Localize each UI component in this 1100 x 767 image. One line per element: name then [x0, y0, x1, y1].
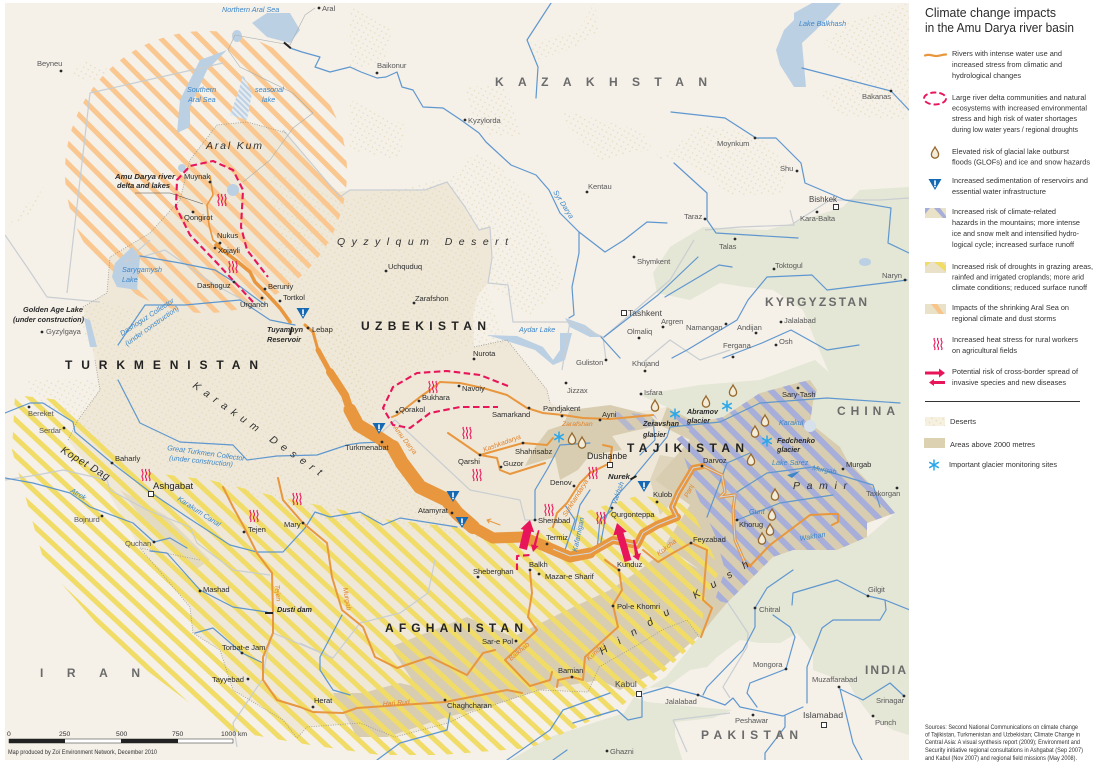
city labels outside the basin: Srinagar [876, 696, 905, 705]
desert and mountain names: Aral Kum [205, 140, 262, 152]
orange river labels: Murgab [341, 587, 352, 611]
feature labels: Fedchenko [777, 436, 815, 445]
borders [5, 63, 909, 752]
city labels outside the basin: Kyzylorda [468, 116, 501, 125]
feature labels: glacier [642, 430, 667, 439]
city labels inside the basin: Pandjakent [543, 404, 581, 413]
capitals [153, 195, 843, 720]
water labels [68, 5, 846, 552]
river basin area [68, 122, 698, 736]
dams [265, 42, 637, 614]
city labels outside the basin: Jizzax [567, 386, 588, 395]
stripes: mountain hazards [665, 380, 895, 603]
city labels outside the basin: Mongora [753, 660, 783, 669]
water labels: Lake [122, 275, 138, 284]
city labels outside the basin: Ghazni [610, 747, 634, 756]
legend: mountain hazards: logical cycle; increased surface runoff [952, 240, 1075, 249]
city labels inside the basin: Darvoz [703, 456, 727, 465]
Panj centre line [553, 466, 745, 563]
basin boundary [68, 122, 699, 738]
city labels inside the basin: Khorug [739, 520, 763, 529]
sources: Security initiative regional consultations in Ashgabat (Sep 2007) [925, 747, 1083, 754]
water labels: Northern Aral Sea [222, 5, 279, 14]
city labels outside the basin: Jalalabad [784, 316, 816, 325]
city labels outside the basin: Peshawar [735, 716, 769, 725]
desert and mountain names: Karakum Desert [190, 380, 325, 479]
delta leader line [135, 193, 203, 204]
city labels inside the basin: Guzor [503, 459, 524, 468]
city labels inside the basin: Torbat-e Jam [222, 643, 265, 652]
city labels outside the basin: Taxkorgan [866, 489, 900, 498]
city labels outside the basin: Chitral [759, 605, 781, 614]
city labels outside the basin: Isfara [644, 388, 663, 397]
city labels inside the basin: Bukhara [422, 393, 451, 402]
scale bar: 0 [7, 731, 11, 738]
city labels inside the basin: Muynak [184, 172, 210, 181]
orange river labels: Kokcha [656, 538, 678, 558]
heat stress icons [142, 194, 605, 524]
city labels inside the basin: Tayyebad [212, 675, 244, 684]
legend: heat stress [934, 335, 1078, 355]
city labels inside the basin [115, 172, 871, 710]
city labels inside the basin: Denov [550, 478, 572, 487]
feature labels: glacier [776, 445, 801, 454]
stripes: Aral Sea impacts [65, 31, 347, 313]
city labels inside the basin: Mary [284, 520, 301, 529]
country names in the basin: AFGHANISTAN [385, 621, 523, 635]
legend: stressed rivers: Rivers with intense water use and [952, 49, 1062, 58]
city labels inside the basin: Tejen [248, 525, 266, 534]
legend: mountain hazards: ice and snow melt and intensified hydro- [952, 229, 1079, 238]
legend: glacial lake floods: Elevated risk of glacial lake outburst [952, 147, 1070, 156]
feature labels: Amu Darya river [114, 172, 176, 181]
legend title: Climate change impacts [925, 6, 1056, 20]
feature labels: Golden Age Lake [23, 305, 84, 314]
legend: river deltas: ecosystems with increased environmental [952, 104, 1087, 112]
water labels: Dashoguz Collector [118, 296, 176, 338]
sources [925, 724, 1083, 762]
city labels outside the basin: Taraz [684, 212, 702, 221]
Amu Darya main stem [216, 245, 750, 566]
legend [924, 6, 1093, 470]
dry riverbeds [228, 8, 315, 182]
feature labels: Abramov [686, 407, 719, 416]
cross-border arrows [519, 520, 641, 562]
orange river labels: Tejen [273, 585, 281, 602]
legend: mountain hazards [925, 207, 1080, 249]
neighbouring country names: KYRGYZSTAN [765, 295, 867, 309]
legend: mountain hazards: hazards in the mountains; more intense [952, 218, 1080, 227]
orange river labels: Kashkadarya [482, 434, 522, 454]
city labels outside the basin: Fergana [723, 341, 752, 350]
water labels: (under construction) [169, 453, 233, 469]
legend title: in the Amu Darya river basin [925, 21, 1074, 35]
legend: river deltas: Large river delta communities and natural [952, 93, 1086, 102]
delta community zones [176, 161, 530, 570]
glacier monitoring sites [554, 400, 772, 446]
city labels inside the basin: Balkh [529, 560, 548, 569]
orange rivers [207, 176, 838, 713]
feature labels: Dusti dam [277, 605, 312, 614]
city labels outside the basin: Talas [719, 242, 737, 251]
city labels inside the basin: Feyzabad [693, 535, 726, 544]
legend: stressed rivers: increased stress from climatic and [952, 60, 1062, 69]
orange river labels [273, 421, 696, 708]
city labels outside the basin: Andijan [737, 323, 762, 332]
water labels: Vakhsh [609, 480, 626, 506]
legend: glacier monitoring [929, 460, 1057, 470]
feature labels: (under construction) [13, 315, 84, 324]
lakes [84, 3, 871, 432]
legend: areas above 2000 metres [924, 438, 1035, 449]
areas above 2000 metres [120, 380, 895, 737]
city labels outside the basin: Olmaliq [627, 327, 652, 336]
desert and mountain names: Qyzylqum Desert [337, 236, 509, 248]
city labels outside the basin: Kentau [588, 182, 612, 191]
city labels outside the basin: Naryn [882, 271, 902, 280]
city labels inside the basin: Ayni [602, 410, 617, 419]
city labels outside the basin: Baikonur [377, 61, 407, 70]
legend: droughts: rainfed and irrigated croplands; more arid [952, 272, 1084, 282]
city labels inside the basin: Baharly [115, 454, 140, 463]
city labels inside the basin: Lebap [312, 325, 333, 334]
water labels: Atrek [68, 485, 88, 502]
city labels outside the basin: Jalalabad [665, 697, 697, 706]
legend: river deltas: stress and high risk of water shortages [952, 114, 1077, 123]
city labels outside the basin: Toktogul [775, 261, 803, 270]
city labels outside the basin: Guliston [576, 358, 603, 367]
city labels outside the basin: Gilgit [868, 585, 886, 594]
city labels inside the basin: Mazar-e Sharif [545, 572, 595, 581]
city labels inside the basin: Uchquduq [388, 262, 422, 271]
city labels outside the basin: Osh [779, 337, 793, 346]
water labels: Lake Sarez [772, 458, 809, 467]
legend: deserts: Deserts [950, 417, 976, 426]
city labels inside the basin: Sherabad [538, 516, 570, 525]
desert and mountain names: Kopet Dag [58, 444, 112, 483]
legend: cross-border spread: invasive species and new diseases [952, 378, 1066, 387]
water labels: Southern [187, 85, 216, 94]
city labels inside the basin: Sary-Tash [782, 390, 815, 399]
city labels inside the basin: Shahrisabz [515, 447, 552, 456]
city labels inside the basin: Termiz [546, 533, 568, 542]
legend: heat stress: Increased heat stress for rural workers [952, 335, 1078, 344]
city labels inside the basin: Turkmenabat [345, 443, 390, 452]
feature labels: Reservoir [267, 335, 302, 344]
legend: cross-border spread [925, 367, 1079, 387]
city labels outside the basin: Moynkum [717, 139, 749, 148]
legend: cross-border spread: Potential risk of cross-border spread of [952, 367, 1079, 376]
feature labels: glacier [686, 416, 711, 425]
city labels inside the basin: Beruniy [268, 282, 293, 291]
city labels outside the basin: Bereket [28, 409, 55, 418]
legend: stressed rivers: hydrological changes [952, 71, 1021, 80]
city labels outside the basin: Kara-Balta [800, 214, 836, 223]
capitals: Kabul [615, 679, 637, 689]
water labels: (under construction) [123, 304, 181, 348]
city labels outside the basin: Aral [322, 4, 336, 13]
orange river labels: Zarafshan [561, 421, 593, 428]
scale bar: 250 [59, 731, 71, 738]
water labels: Karakul [779, 418, 804, 427]
legend: Aral Sea impacts: regional climate and dust storms [952, 314, 1056, 323]
city labels inside the basin: Samarkand [492, 410, 530, 419]
city labels inside the basin: Qongirot [184, 213, 213, 222]
legend: areas above 2000 metres: Areas above 2000 metres [950, 440, 1035, 449]
city labels outside the basin: Muzaffarabad [812, 675, 857, 684]
water labels: Wakhan [799, 530, 826, 543]
orange river labels: Panj [683, 483, 696, 499]
city labels outside the basin: Serdar [39, 426, 62, 435]
water labels: Gunt [749, 507, 766, 516]
legend: stressed rivers [925, 49, 1062, 80]
water labels: Great Turkmen Collector [167, 443, 246, 463]
neighbouring country names: PAKISTAN [701, 728, 798, 742]
legend: glacial lake floods: floods (GLOFs) and ice and snow hazards [952, 158, 1090, 166]
feature labels: Tuyamuyn [267, 325, 303, 334]
capital markers [148, 204, 838, 728]
city labels inside the basin: Qurgonteppa [611, 510, 655, 519]
city labels outside the basin: Bojnurd [74, 515, 100, 524]
capitals: Dushanbe [587, 451, 627, 461]
city labels inside the basin: Urganch [240, 300, 268, 309]
sources: and Kabul (Nov 2007) and regional field missions (May 2008). [925, 755, 1077, 762]
feature labels: Nurek [608, 472, 631, 481]
legend: river deltas [924, 92, 1087, 134]
legend: sedimentation: essential water infrastructure [952, 187, 1046, 196]
city markers [28, 7, 906, 752]
country names in the basin [65, 319, 744, 635]
sources: Sources: Second National Communications on climate change [925, 724, 1078, 731]
city labels outside the basin: Shu [780, 164, 793, 173]
sources: Central Asia: A visual synthesis report (2009); Environment and [925, 739, 1080, 746]
desert and mountain names: Hindu Kush [597, 559, 751, 658]
green highlands outside the basin [507, 187, 909, 762]
neighbouring country names: CHINA [837, 404, 895, 418]
deserts [7, 3, 909, 420]
water labels: Kafarnigan [570, 517, 586, 552]
city labels inside the basin: Sheberghan [473, 567, 514, 576]
legend: Aral Sea impacts: Impacts of the shrinking Aral Sea on [952, 303, 1069, 312]
legend: droughts [925, 262, 1093, 292]
city labels inside the basin: Tortkol [283, 293, 305, 302]
neighbouring country names: IRAN [40, 666, 140, 680]
legend: heat stress: on agricultural fields [952, 346, 1017, 355]
feature labels: delta and lakes [117, 181, 170, 190]
stripes: droughts [12, 395, 720, 755]
country names in the basin: UZBEKISTAN [361, 319, 486, 333]
city labels inside the basin: Kunduz [617, 560, 643, 569]
seasonal lake [230, 75, 252, 120]
scale bar: 750 [172, 731, 184, 738]
orange river labels: Balkhab [508, 641, 531, 663]
city labels outside the basin: Beyneu [37, 59, 62, 68]
capitals: Islamabad [803, 710, 843, 720]
city labels inside the basin: Nurota [473, 349, 496, 358]
city labels outside the basin: Quchan [125, 539, 151, 548]
legend: glacial lake floods [931, 147, 1090, 166]
legend: mountain hazards: Increased risk of climate-related [952, 207, 1056, 216]
desert and mountain names: Pamir [793, 480, 848, 492]
legend: droughts: Increased risk of droughts in grazing areas, [952, 262, 1093, 271]
city labels inside the basin: Sar-e Pol [482, 637, 513, 646]
map credit: Map produced by Zoï Environment Network, December 2010 [8, 749, 157, 756]
legend divider [925, 401, 1080, 402]
city labels inside the basin: Murgab [846, 460, 871, 469]
city labels outside the basin: Namangan [686, 323, 723, 332]
city labels inside the basin: Zarafshon [415, 294, 448, 303]
city labels outside the basin: Khujand [632, 359, 659, 368]
city labels outside the basin: Bakanas [862, 92, 891, 101]
orange river labels: Surkhandarya [562, 478, 590, 518]
legend: glacier monitoring: Important glacier monitoring sites [949, 460, 1057, 469]
city labels inside the basin: Kulob [653, 490, 672, 499]
legend title [925, 6, 1074, 35]
city labels outside the basin: Gyzylgaya [46, 327, 82, 336]
orange river labels: Hari Rud [383, 699, 410, 708]
water labels: Syr Darya [551, 188, 576, 220]
city labels inside the basin: Herat [314, 696, 333, 705]
city labels outside the basin [28, 4, 905, 756]
water labels: seasonal [255, 85, 284, 94]
scale bar: 1000 km [221, 731, 247, 738]
city labels inside the basin: Dashoguz [197, 281, 231, 290]
city labels inside the basin: Chaghcharan [447, 701, 492, 710]
water labels: Karakum Canal [176, 494, 223, 529]
scale bar [7, 731, 247, 743]
legend: sedimentation: Increased sedimentation of reservoirs and [952, 176, 1088, 185]
city labels inside the basin: Xojayli [218, 246, 240, 255]
city labels inside the basin: Atamyrat [418, 506, 449, 515]
orange river labels: Amu Darya [391, 424, 418, 456]
capitals: Ashgabat [153, 481, 194, 492]
legend: river deltas: during low water years / regional droughts [952, 125, 1078, 134]
legend: sedimentation [928, 176, 1088, 196]
sedimentation warnings [296, 308, 650, 528]
glacier lake drops [568, 385, 779, 544]
legend: deserts [925, 417, 976, 426]
capitals: Tashkent [628, 308, 663, 318]
scale bar: 500 [116, 731, 128, 738]
feature labels [13, 172, 815, 614]
city labels inside the basin: Qarshi [458, 457, 480, 466]
legend: Aral Sea impacts [925, 303, 1069, 323]
city labels inside the basin: Mashad [203, 585, 230, 594]
city labels inside the basin: Nukus [217, 231, 238, 240]
orange river labels: Kunduz [586, 641, 608, 662]
country names in the basin: TURKMENISTAN [65, 358, 258, 372]
feature labels: Zeravshan [642, 419, 679, 428]
sources: of Tajikistan, Turkmenistan and Uzbekistan; Climate Change in [925, 732, 1080, 738]
city labels outside the basin: Shymkent [637, 257, 671, 266]
water labels: Lake Balkhash [799, 19, 846, 28]
city labels inside the basin: Pol-e Khomri [617, 602, 660, 611]
neighbouring country names: INDIA [865, 663, 906, 677]
city labels inside the basin: Navoiy [462, 384, 485, 393]
country names in the basin: TAJIKISTAN [627, 441, 744, 455]
water labels: Sarygamysh [122, 265, 162, 274]
water labels: Aral Sea [187, 95, 216, 104]
desert and mountain names [58, 140, 847, 658]
neighbouring country names [40, 75, 906, 742]
city labels inside the basin: Qorakol [399, 405, 425, 414]
water labels: Murgab [812, 463, 837, 476]
water labels: Aydar Lake [518, 325, 555, 334]
city labels outside the basin: Punch [875, 718, 896, 727]
desert dots over basin [70, 302, 500, 540]
neighbouring country names: KAZAKHSTAN [495, 75, 707, 89]
city labels inside the basin: Bamian [558, 666, 583, 675]
city labels outside the basin: Argren [661, 317, 683, 326]
capitals: Bishkek [809, 195, 838, 204]
legend: droughts: climate conditions; reduced surface runoff [952, 283, 1088, 292]
water labels: lake [262, 95, 275, 104]
